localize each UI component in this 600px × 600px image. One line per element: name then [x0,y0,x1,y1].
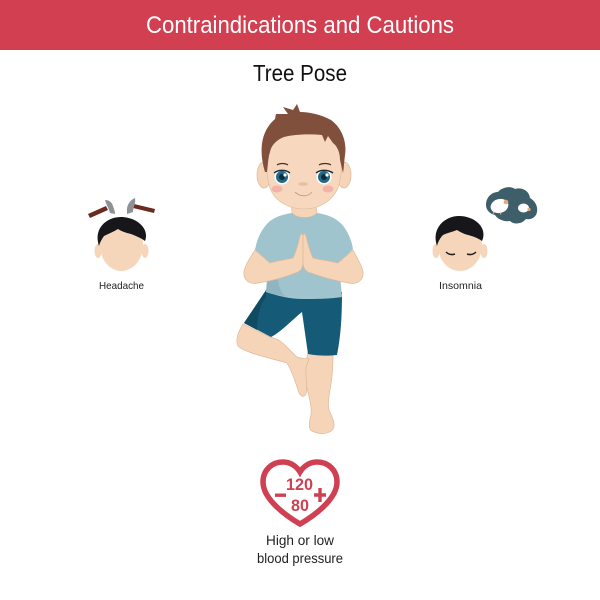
label: blood pressure [257,532,343,566]
left eye [274,170,290,184]
bent leg [237,324,309,396]
shorts shadow [244,291,266,330]
plus sign [314,488,326,502]
small sheep [518,204,529,212]
icon: blood pressure heart [263,462,337,524]
mouth [295,192,312,196]
head [432,244,440,258]
right eye [316,170,333,184]
shirt [255,213,353,299]
header banner [0,0,600,50]
right arm [303,234,363,283]
head [94,244,102,258]
ears [257,162,271,188]
minus sign [275,494,286,497]
left hammer [88,200,115,218]
value 120: 120 [286,476,313,494]
closed eyes [446,252,476,255]
shirt shadow [266,279,285,296]
cheeks [272,186,334,192]
icon: thought cloud with sheep [486,187,537,223]
shorts [244,290,342,356]
face [266,130,342,209]
eyebrows [277,164,331,165]
label: blood pressure: blood pressure [257,550,343,566]
big sheep [489,197,510,215]
pose heading: Tree Pose [253,60,347,86]
left arm [244,234,303,283]
label: blood pressure: High or low [266,532,335,548]
label: insomnia: Insomnia [439,280,482,292]
right hammer [127,198,155,214]
standing leg [306,352,334,433]
value 80: 80 [291,497,309,515]
label: headache: Headache [99,280,144,292]
icon: insomnia [432,216,488,271]
nose [298,182,308,186]
hair [262,104,345,173]
title: Contraindications and Cautions [146,12,454,39]
icon: headache [88,198,155,271]
figure: boy in tree pose [237,104,363,433]
neck [291,203,317,218]
